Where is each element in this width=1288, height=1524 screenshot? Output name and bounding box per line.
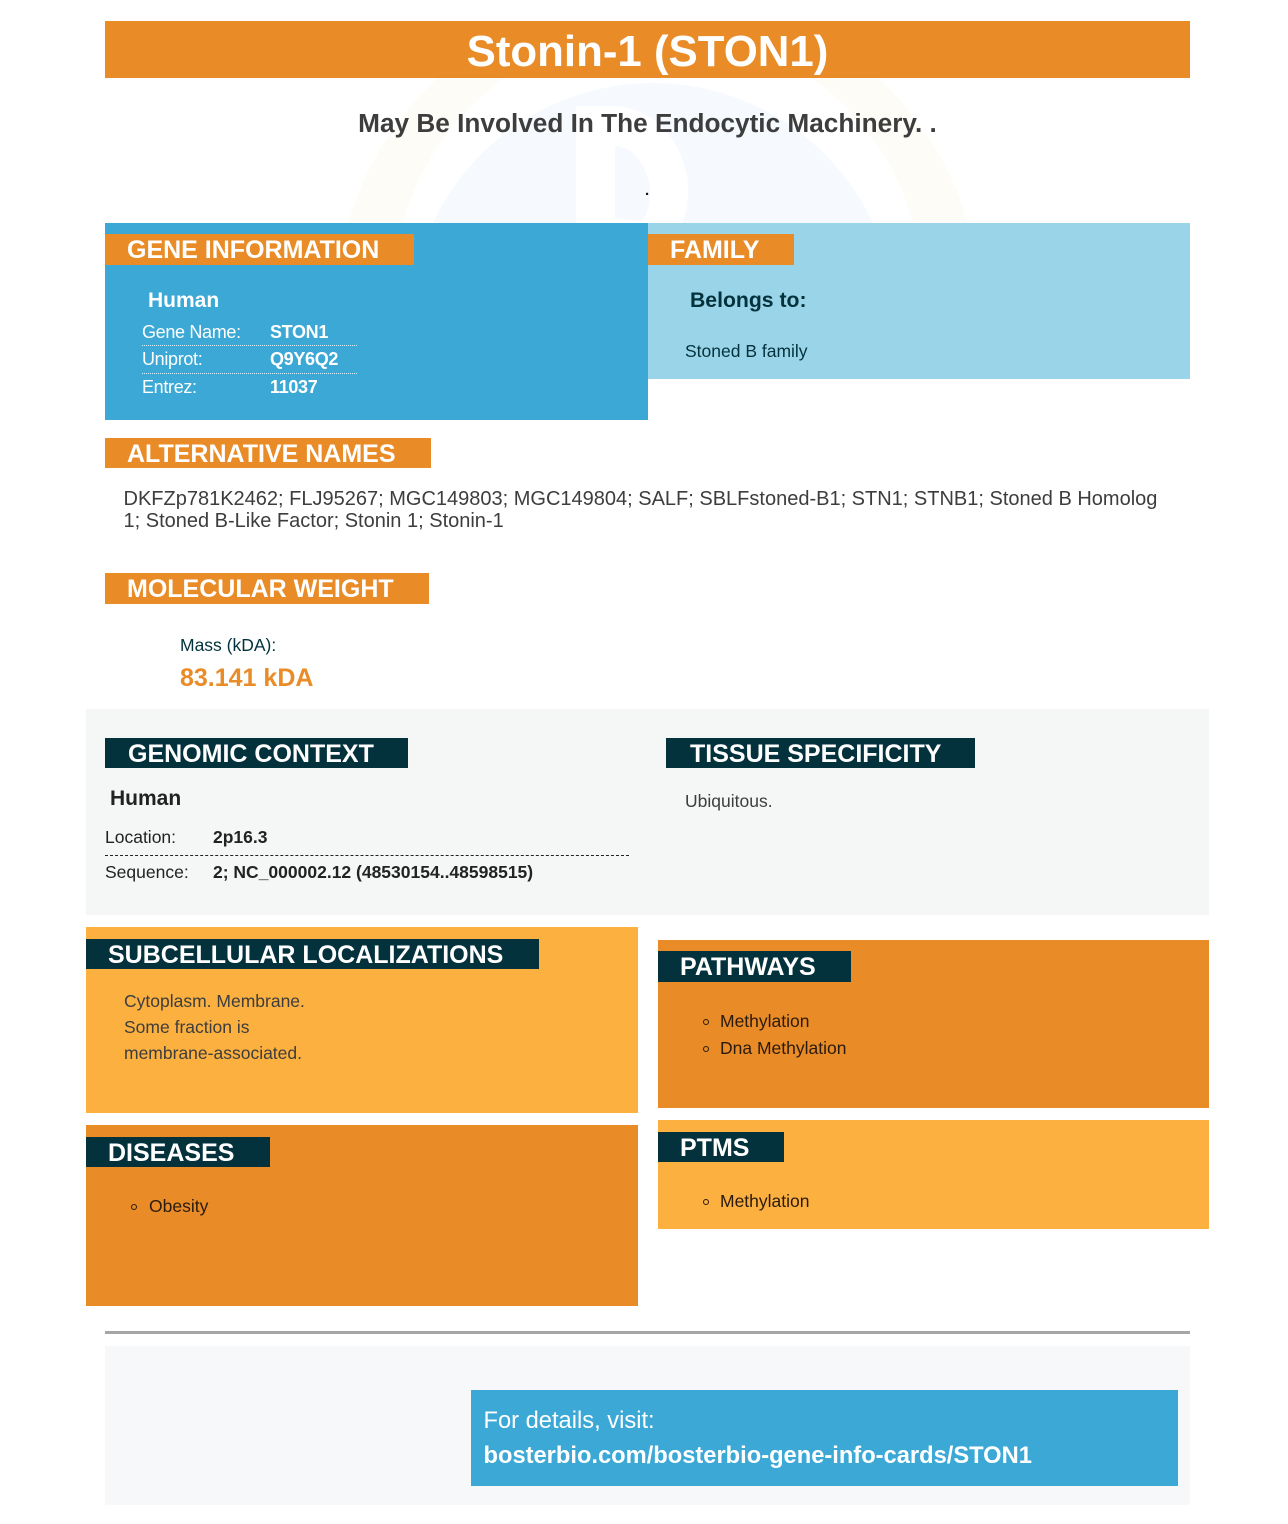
sequence row: Sequence: <box>105 862 189 882</box>
heading: subcellular localizations: SUBCELLULAR LOCALIZATIONS <box>108 941 503 969</box>
pathways list: Methylation <box>720 1011 810 1031</box>
gene name row: STON1 <box>270 322 328 342</box>
heading: pathways <box>658 951 851 982</box>
small dot text: . <box>645 182 649 199</box>
heading: genomic context: GENOMIC CONTEXT <box>128 740 374 768</box>
subtitle: May Be Involved In The Endocytic Machinery. . <box>358 108 937 138</box>
uniprot row: Uniprot: <box>142 349 202 369</box>
panel: diseases <box>86 1125 638 1306</box>
heading: family <box>648 234 794 265</box>
panel: gene information <box>105 223 648 420</box>
entrez row: Entrez: <box>142 377 197 397</box>
heading: diseases <box>86 1137 270 1167</box>
ptms list: Methylation <box>720 1191 810 1211</box>
heading: ptms: PTMS <box>680 1134 749 1162</box>
localization text: Some fraction is <box>124 1017 249 1037</box>
pathways list <box>703 1011 846 1058</box>
alternative names text: 1; Stoned B-Like Factor; Stonin 1; Stonin-1 <box>124 510 504 532</box>
panel: alternative names <box>105 438 1157 532</box>
heading: diseases: DISEASES <box>108 1139 234 1167</box>
panel: pathways <box>658 940 1209 1108</box>
belongs to label: Belongs to: <box>690 289 807 312</box>
localization text <box>124 991 305 1063</box>
heading: gene information: GENE INFORMATION <box>127 236 379 264</box>
panel: subcellular localizations <box>86 927 638 1113</box>
title banner: Stonin-1 (STON1) <box>467 27 828 76</box>
mass label: Mass (kDA): <box>180 635 276 655</box>
heading: pathways: PATHWAYS <box>680 953 816 981</box>
pathways list: Dna Methylation <box>720 1038 846 1058</box>
gene name row: Gene Name: <box>142 322 241 342</box>
localization text: Cytoplasm. Membrane. <box>124 991 305 1011</box>
species label: Human <box>110 787 181 810</box>
species label: Human <box>148 289 219 312</box>
heading: tissue specificity: TISSUE SPECIFICITY <box>690 740 941 768</box>
diseases list: Obesity <box>149 1196 208 1216</box>
footer panel <box>105 1346 1190 1505</box>
location row: Location: <box>105 827 176 847</box>
heading: alternative names: ALTERNATIVE NAMES <box>127 440 396 468</box>
heading: family: FAMILY <box>670 236 759 264</box>
localization text: membrane-associated. <box>124 1043 302 1063</box>
callout: details link <box>471 1390 1178 1486</box>
panel: molecular weight <box>105 573 429 692</box>
heading: molecular weight: MOLECULAR WEIGHT <box>127 575 394 603</box>
title banner <box>105 21 1190 78</box>
uniprot row <box>142 348 357 374</box>
alternative names text: DKFZp781K2462; FLJ95267; MGC149803; MGC149804; SALF; SBLFstoned-B1; STN1; STNB1; Stoned B Homolog <box>124 488 1157 510</box>
panel: genomic context and tissue specificity <box>86 709 1209 915</box>
alternative names text <box>124 488 1157 532</box>
panel: family <box>648 223 1190 379</box>
entrez row: 11037 <box>270 377 317 397</box>
background watermark logo <box>434 83 872 223</box>
gene name row <box>142 321 357 346</box>
heading: ptms <box>658 1132 784 1162</box>
entrez row <box>142 377 317 397</box>
callout text: For details, visit: <box>484 1408 655 1434</box>
callout url: bosterbio.com/bosterbio-gene-info-cards/STON1 <box>484 1443 1032 1469</box>
location row: 2p16.3 <box>213 827 267 847</box>
uniprot row: Q9Y6Q2 <box>270 349 338 369</box>
sequence row: 2; NC_000002.12 (48530154..48598515) <box>213 862 533 882</box>
location row <box>105 826 629 856</box>
family value: Stoned B family <box>685 341 808 361</box>
tissue specificity text: Ubiquitous. <box>685 791 773 811</box>
mass value: 83.141 kDA <box>180 664 313 692</box>
panel: ptms <box>658 1120 1209 1229</box>
